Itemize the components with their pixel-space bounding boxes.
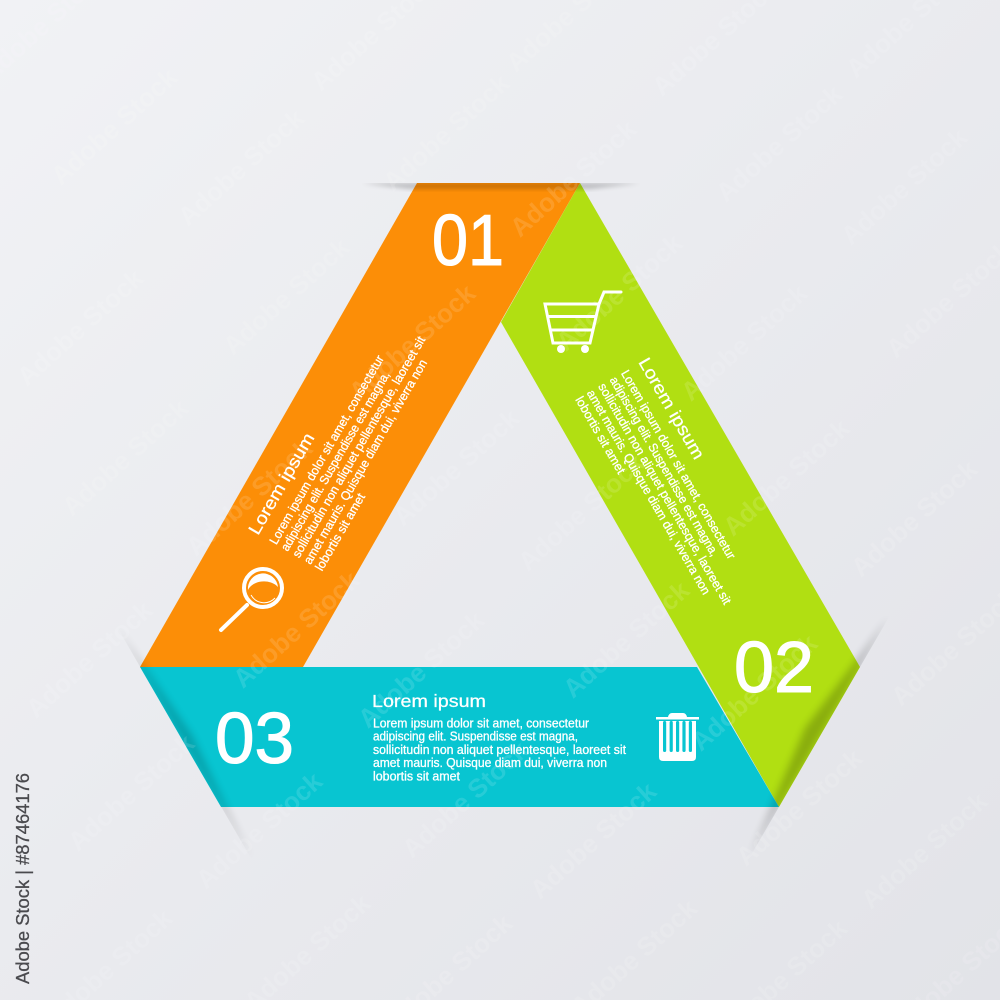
watermark pattern: Adobe Stock xyxy=(557,575,695,704)
triangle infographic xyxy=(117,183,889,860)
watermark pattern: Adobe Stock xyxy=(190,766,328,895)
text block: green ribbon: Lorem ipsum xyxy=(635,354,709,463)
number 03: 03 xyxy=(215,699,294,779)
text block: green ribbon: amet mauris. Quisque diam dui, viverra non xyxy=(584,387,713,597)
text block: teal ribbon: amet mauris. Quisque diam dui, viverra non xyxy=(373,756,607,770)
icon: magnifying glass xyxy=(221,569,282,630)
panel: green ribbon 02 xyxy=(501,183,860,807)
stock id caption: Adobe Stock | #87464176 xyxy=(13,773,33,984)
text block: teal ribbon: sollicitudin non aliquet pellentesque, laoreet sit xyxy=(373,743,627,757)
watermark pattern: Adobe Stock xyxy=(343,278,481,407)
panel: teal ribbon 03 xyxy=(140,667,779,807)
icon: trash can xyxy=(656,713,699,761)
text block: green ribbon: lobortis sit amet xyxy=(572,394,628,477)
watermark pattern: Adobe Stock xyxy=(56,393,194,522)
watermark pattern: Adobe Stock xyxy=(835,122,973,251)
watermark pattern: Adobe Stock xyxy=(20,595,158,724)
text block: teal ribbon: adipiscing elit. Suspendisse est magna, xyxy=(373,730,578,744)
number 02: 02 xyxy=(734,628,814,708)
watermark pattern: Adobe Stock xyxy=(45,62,183,191)
text block: orange ribbon: adipiscing elit. Suspendisse est magna, xyxy=(278,369,393,553)
watermark pattern: Adobe Stock xyxy=(550,228,688,357)
watermark pattern: Adobe Stock xyxy=(845,454,983,583)
watermark pattern: Adobe Stock xyxy=(387,403,525,532)
text block: teal ribbon xyxy=(372,691,627,783)
watermark pattern: Adobe Stock xyxy=(352,605,490,734)
watermark pattern: Adobe Stock xyxy=(377,68,515,197)
watermark pattern: Adobe Stock xyxy=(504,114,642,243)
watermark pattern: Adobe Stock xyxy=(180,433,318,562)
watermark pattern: Adobe Stock xyxy=(217,232,355,361)
text block: green ribbon xyxy=(572,354,779,621)
text block: orange ribbon: Lorem ipsum xyxy=(244,429,318,538)
watermark pattern: Adobe Stock xyxy=(717,413,855,542)
icon: shopping cart xyxy=(545,292,621,353)
text block: orange ribbon: Lorem ipsum dolor sit amet, consectetur xyxy=(267,353,387,547)
text block: orange ribbon: lobortis sit amet xyxy=(312,490,368,573)
fold shadow: right xyxy=(755,628,882,844)
text block: orange ribbon: amet mauris. Quisque diam dui, viverra non xyxy=(301,357,430,567)
watermark pattern: Adobe Stock xyxy=(710,79,848,208)
watermark pattern: Adobe Stock xyxy=(396,735,534,864)
watermark pattern: Adobe Stock xyxy=(512,448,650,577)
panel: orange ribbon 01 xyxy=(140,183,580,667)
text block: green ribbon: sollicitudin non aliquet pellentesque, laoreet sit xyxy=(595,381,734,607)
text block: teal ribbon: Lorem ipsum dolor sit amet, consectetur xyxy=(373,716,589,730)
watermark pattern: Adobe Stock xyxy=(62,728,200,857)
watermark pattern: Adobe Stock xyxy=(675,278,813,407)
watermark pattern: Adobe Stock xyxy=(524,776,662,905)
watermark pattern: Adobe Stock xyxy=(11,263,149,392)
watermark pattern: Adobe Stock xyxy=(172,103,310,232)
text block: green ribbon: Lorem ipsum dolor sit amet, consectetur xyxy=(618,368,738,562)
watermark pattern: Adobe Stock xyxy=(685,628,823,757)
watermark pattern: Adobe Stock xyxy=(855,786,993,915)
fold shadow: top xyxy=(362,183,640,189)
watermark pattern: Adobe Stock xyxy=(227,565,365,694)
text block: teal ribbon: Lorem ipsum xyxy=(372,691,486,711)
text block: green ribbon: adipiscing elit. Suspendisse est magna, xyxy=(607,374,721,559)
text block: orange ribbon: sollicitudin non aliquet pellentesque, laoreet sit xyxy=(290,334,428,560)
fold shadow: left xyxy=(129,646,241,838)
number 01: 01 xyxy=(432,201,504,281)
watermark pattern: Adobe Stock xyxy=(730,743,868,872)
text block: teal ribbon: lobortis sit amet xyxy=(373,769,461,783)
text block: orange ribbon xyxy=(244,308,451,574)
